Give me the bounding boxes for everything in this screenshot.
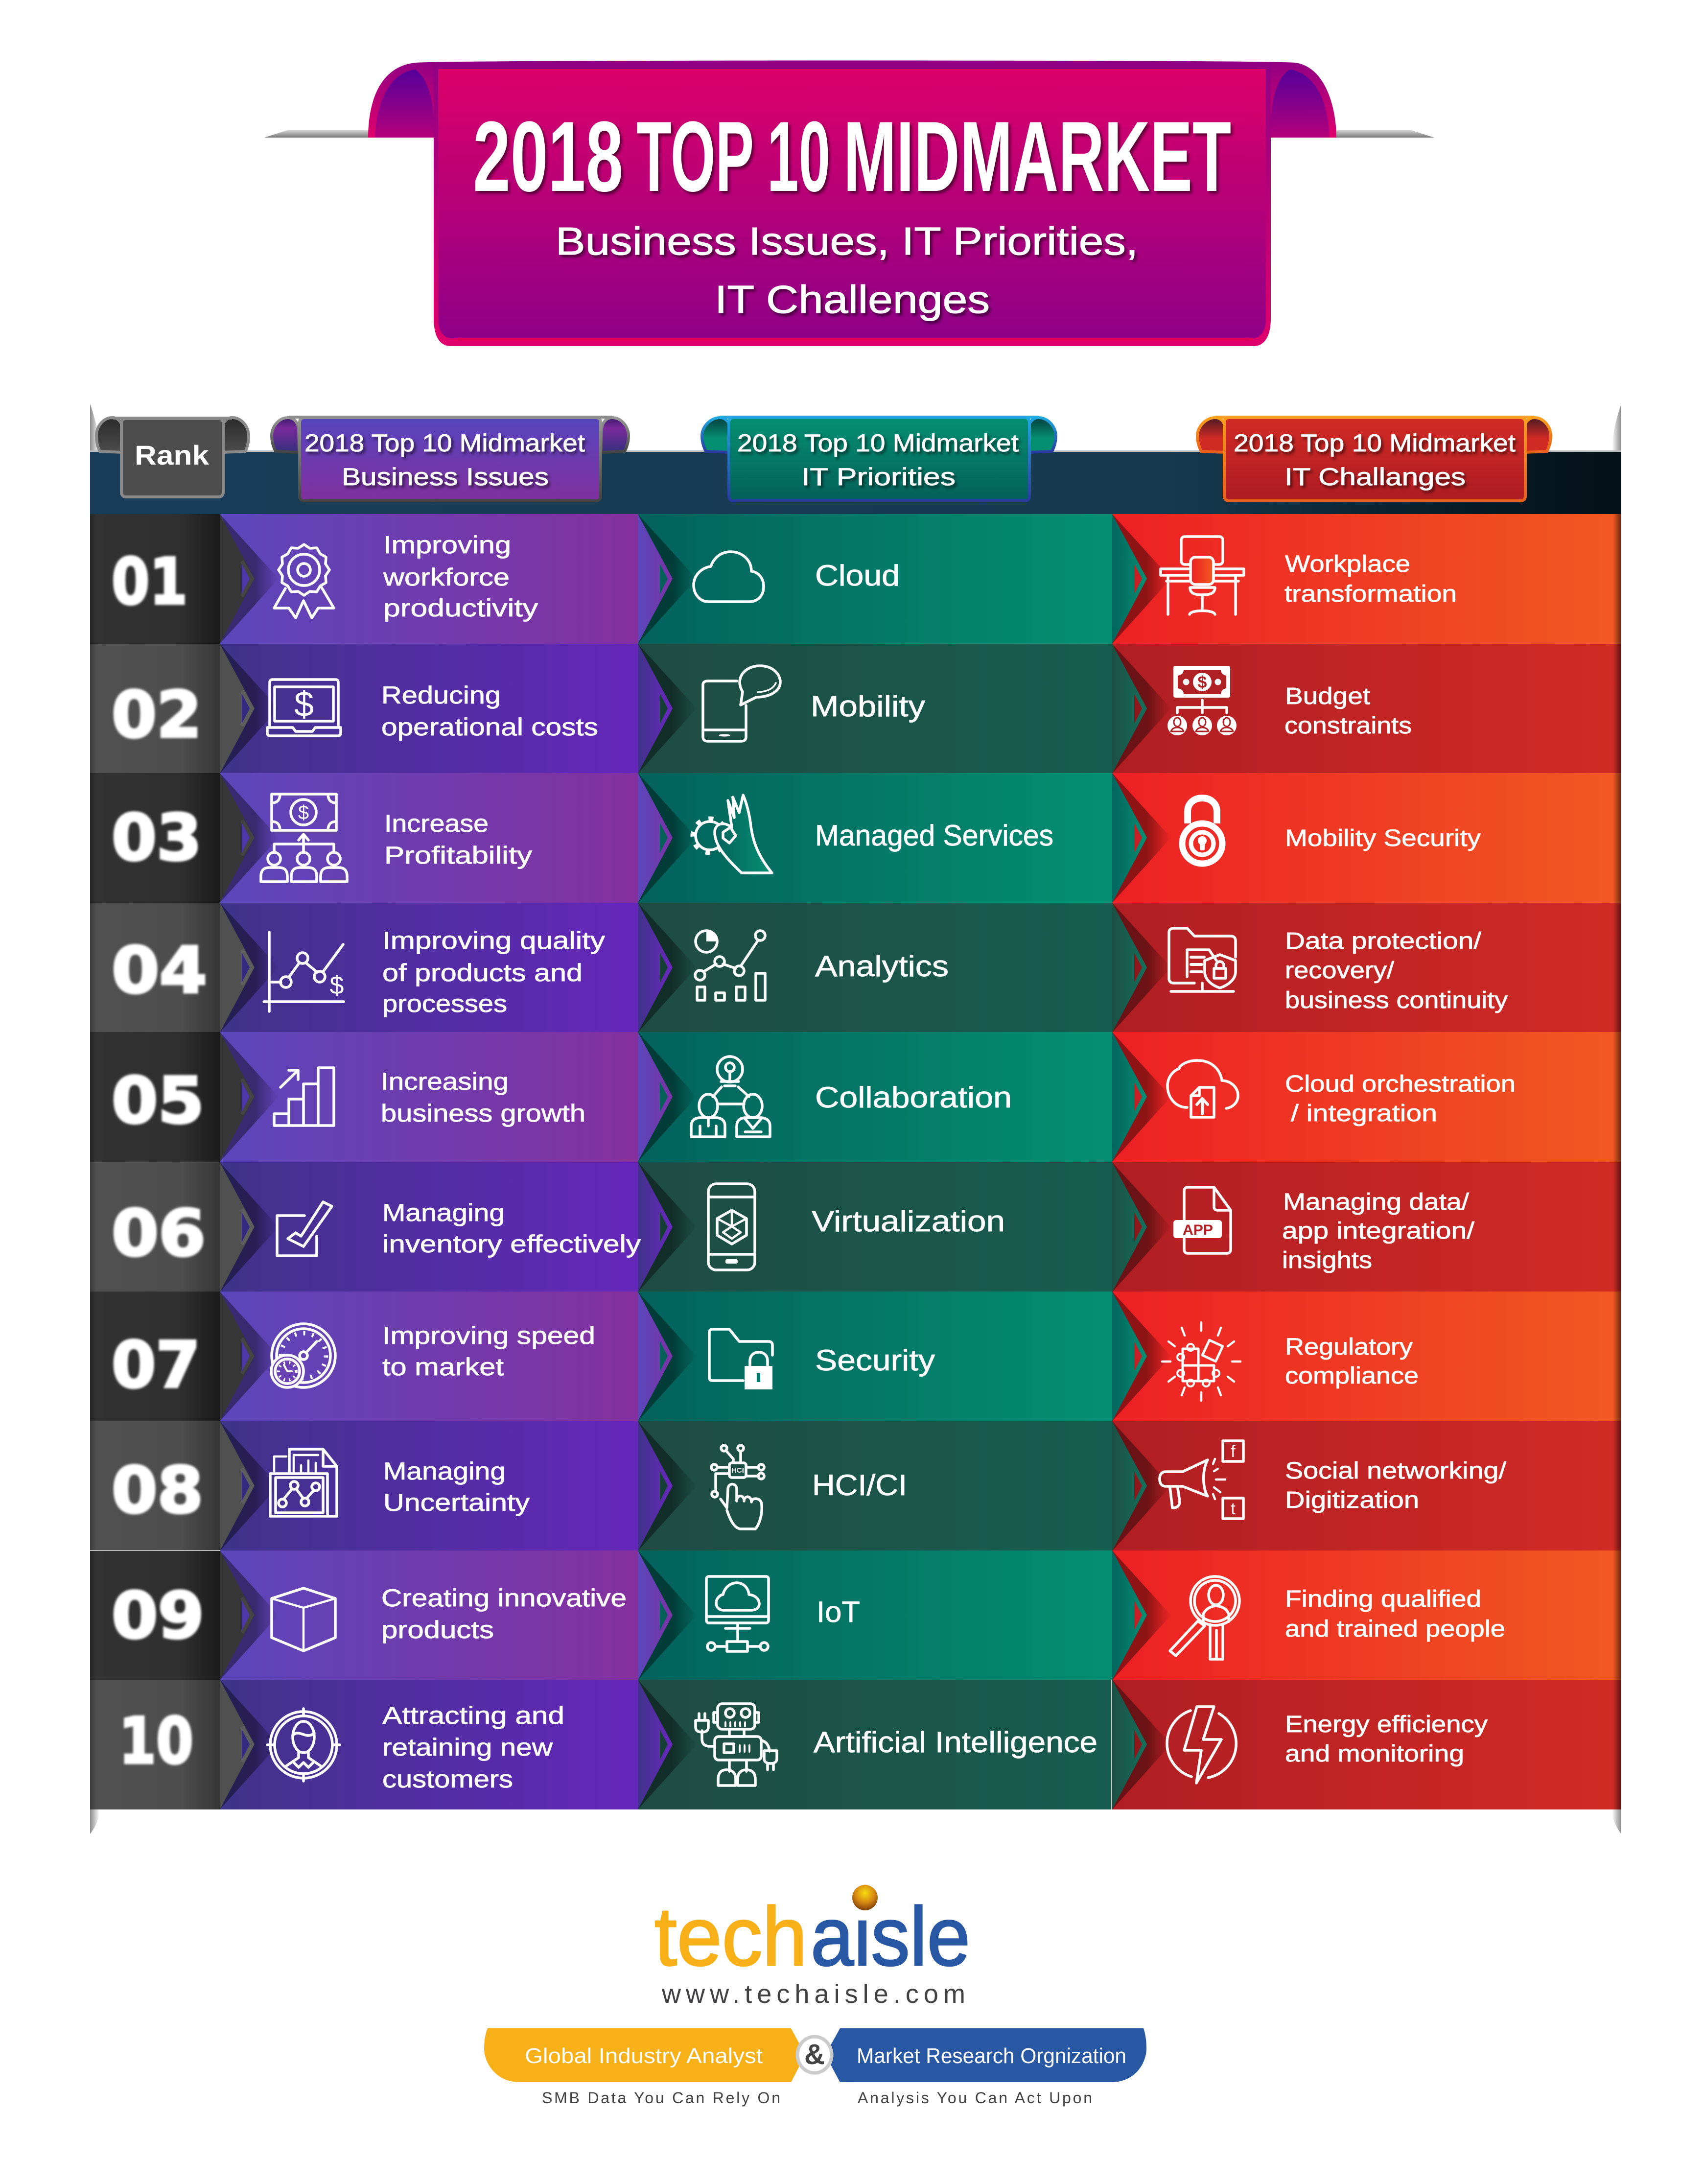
icon: data protection [1169,928,1236,991]
text: Improving quality of products and processes: Improving quality [382,927,605,954]
subtitle: IT Challenges [715,278,990,321]
text: Increasing business growth: business growth [381,1100,585,1127]
header: IT Priorities [702,417,1056,501]
rank 09 [90,1550,220,1680]
rank 04: 04 [112,933,207,1008]
text: Improving speed to market [382,1322,595,1381]
text: Managing inventory effectively [382,1199,641,1258]
icon: app file [1173,1187,1231,1253]
text: Budget constraints: constraints [1284,713,1412,739]
text: Increase Profitability [384,810,532,869]
icon: gear and hand [693,795,772,873]
text: Improving speed to market: Improving speed [382,1322,595,1349]
tagline left: SMB Data You Can Rely On [542,2089,780,2107]
text: Increasing business growth [381,1068,585,1127]
text: Improving workforce productivity: productivity [383,594,538,622]
text: Cloud orchestration / integration [1285,1071,1516,1127]
header: IT Priorities: 2018 Top 10 Midmarket [737,429,1019,457]
row 03 [90,773,1621,903]
subtitle: Business Issues, IT Priorities, [556,219,1138,263]
text: Mobility: Mobility [811,690,925,723]
website url: www.techaisle.com [661,1979,965,2009]
text: Mobility Security: Mobility Security [1285,825,1481,851]
text: Cloud orchestration / integration: Cloud orchestration [1285,1071,1516,1097]
rank 06 [90,1162,220,1292]
text: Workplace transformation [1284,551,1457,607]
row 02 [90,644,1621,774]
icon: HCI touch hand [711,1445,764,1529]
text: Data protection/ recovery/ business continuity [1285,928,1508,1013]
text: Managing data/ app integration/ insights: app integration/ [1282,1218,1475,1244]
icon: mobile phone with bubble [703,666,780,741]
rank 09: 09 [112,1578,204,1653]
icon: analytics [695,931,765,1000]
text: Finding qualified and trained people [1285,1586,1505,1642]
header: IT Challanges: IT Challanges [1284,463,1466,491]
icon: money and people: $ [298,802,309,823]
icon: money and people [261,794,347,882]
text: Creating innovative products: Creating innovative [381,1584,627,1612]
text: Regulatory compliance: compliance [1285,1363,1419,1389]
rank 02: 02 [112,678,202,752]
text: Virtualization: Virtualization [812,1205,1005,1238]
rank 05: 05 [112,1063,204,1138]
text: Increase Profitability: Profitability [384,842,532,869]
header: Business Issues [272,417,629,501]
icon: magnifier with person [1170,1576,1239,1659]
text: Energy efficiency and monitoring [1285,1712,1488,1767]
text: Managing Uncertainty: Managing [383,1457,506,1485]
text: Managing Uncertainty [383,1457,530,1516]
icon: padlock [1182,798,1222,864]
rank 10: 10 [119,1704,193,1778]
text: HCI/CI: HCI/CI [812,1469,907,1502]
rank 03 [90,773,220,903]
icon: energy bolt [1167,1707,1236,1783]
text: Cloud orchestration / integration: / integration [1291,1101,1437,1127]
text: Managed Services: Managed Services [815,819,1053,852]
icon: line chart with dollar: $ [330,971,344,1000]
row 07 [90,1292,1621,1421]
icon: check box [277,1202,332,1256]
rank 08: 08 [112,1453,203,1527]
icon: report with chart [270,1449,337,1516]
rank 07 [90,1292,220,1421]
text: Improving workforce productivity: workforce [383,564,510,591]
rank 02 [90,644,220,773]
icon: growth bars [274,1068,334,1126]
text: Reducing operational costs: operational costs [381,713,598,741]
text: Attracting and retaining new customers [382,1702,564,1793]
text: Energy efficiency and monitoring: Energy efficiency [1285,1712,1488,1738]
title text: MIDMARKET [843,101,1231,212]
text: Budget constraints: Budget [1285,683,1370,709]
text: Creating innovative products [381,1584,627,1644]
text: Social networking/ Digitization: Social networking/ [1285,1458,1507,1484]
text: Finding qualified and trained people: and trained people [1285,1616,1505,1642]
row 04 [90,903,1621,1033]
icon: megaphone and social: t [1231,1500,1236,1518]
text: Budget constraints [1284,683,1412,739]
text: Security: Security [815,1344,935,1377]
icon: app file: APP [1183,1222,1213,1238]
row 09 [90,1550,1621,1680]
text: Improving quality of products and processes: of products and [382,959,583,986]
text: Improving quality of products and processes [382,927,605,1017]
header: Business Issues: Business Issues [342,463,549,491]
text: Energy efficiency and monitoring: and monitoring [1285,1741,1464,1767]
row 05 [90,1032,1621,1162]
rank 04 [90,903,220,1032]
header: IT Challanges [1197,417,1551,501]
text: Regulatory compliance [1285,1334,1419,1389]
icon: budget bill and people [1167,666,1237,735]
title text: 2018 [473,101,623,212]
rank 10 [90,1680,220,1809]
text: Workplace transformation: Workplace [1285,551,1410,577]
text: Social networking/ Digitization [1285,1458,1507,1513]
title text: 10 [767,101,830,212]
icon: megaphone and social: f [1231,1442,1236,1461]
text: Managing inventory effectively: Managing [382,1199,505,1226]
icon: secure folder [709,1329,772,1389]
table header bar [90,404,1621,1834]
rank 07: 07 [112,1328,200,1402]
rank 05 [90,1032,220,1162]
icon: IoT monitor [706,1576,769,1651]
rank 03: 03 [112,800,202,875]
text: Artificial Intelligence: Artificial Intelligence [814,1726,1097,1759]
icon: line chart with dollar [264,932,344,1011]
text: Managing data/ app integration/ insights: insights [1282,1247,1372,1273]
row 08 [90,1421,1621,1551]
rank 01 [90,514,220,644]
icon: cloud [694,552,764,602]
ampersand badge: & [804,2039,825,2070]
text: Managing Uncertainty: Uncertainty [383,1489,530,1516]
text: Collaboration: Collaboration [815,1081,1012,1114]
icon: cube [272,1588,335,1651]
text: Reducing operational costs: Reducing [381,681,501,709]
text: Managing data/ app integration/ insights: Managing data/ [1283,1189,1470,1215]
pill: Market Research Orgnization [825,2028,1146,2082]
text: Increase Profitability: Increase [384,810,489,837]
icon: virtualization phone [708,1184,755,1270]
icon: collaboration people [691,1057,770,1137]
text: Reducing operational costs [381,681,598,741]
text: Regulatory compliance: Regulatory [1285,1334,1413,1360]
icon: robot [696,1704,777,1785]
icon: laptop with dollar: $ [294,685,314,724]
header: IT Challanges: 2018 Top 10 Midmarket [1234,429,1516,457]
text: Improving workforce productivity: Improving [383,531,511,559]
text: Data protection/ recovery/ business continuity: Data protection/ [1285,928,1482,954]
logo: techaisle: tech [654,1890,807,1983]
rank 01: 01 [112,544,187,619]
pill: Global Industry Analyst [484,2028,805,2082]
icon: cloud upload [1167,1060,1238,1117]
text: Analytics: Analytics [815,950,949,983]
text: Increasing business growth: Increasing [381,1068,509,1095]
text: Data protection/ recovery/ business continuity: business continuity [1285,987,1508,1013]
pill: Global Industry Analyst: Global Industry Analyst [525,2044,763,2068]
text: Attracting and retaining new customers: customers [382,1765,513,1793]
text: Managing data/ app integration/ insights [1282,1189,1475,1273]
logo: techaisle [654,1885,970,1983]
header: IT Priorities: IT Priorities [801,463,956,491]
text: Managing inventory effectively: inventory effectively [382,1230,641,1258]
icon: laptop with dollar [267,680,341,736]
title banner [264,61,1434,346]
header: Rank: Rank [135,440,210,470]
icon: speedometer [271,1324,335,1387]
icon: budget bill and people: $ [1198,673,1207,692]
title text [473,101,1231,212]
text: Creating innovative products: products [381,1616,494,1644]
text: IoT: IoT [817,1596,860,1628]
text: Data protection/ recovery/ business continuity: recovery/ [1285,958,1395,984]
ampersand badge [797,2037,832,2073]
icon: workplace desk [1161,537,1244,614]
logo ball [852,1885,878,1910]
text: Workplace transformation: transformation [1284,581,1457,607]
row 10 [90,1680,1621,1809]
text: Improving speed to market: to market [382,1353,504,1381]
tagline right: Analysis You Can Act Upon [858,2089,1092,2107]
text: Cloud: Cloud [815,559,900,592]
text: Attracting and retaining new customers: Attracting and [382,1702,564,1729]
text: Improving workforce productivity [383,531,538,622]
rank 06: 06 [112,1196,206,1270]
subtitle [556,219,1138,321]
text: Improving quality of products and processes: processes [382,990,507,1017]
icon: megaphone and social [1160,1441,1243,1519]
icon: puzzle with rays [1162,1322,1240,1401]
row 06 [90,1162,1621,1292]
icon: HCI touch hand: HCI [731,1466,744,1475]
pill: Market Research Orgnization: Market Research Orgnization [857,2044,1126,2068]
text: Social networking/ Digitization: Digitization [1285,1487,1419,1513]
text: Finding qualified and trained people: Finding qualified [1285,1586,1481,1612]
rank 08 [90,1421,220,1550]
logo: techaisle: aisle [811,1890,970,1983]
header: Business Issues: 2018 Top 10 Midmarket [304,429,585,457]
text: Attracting and retaining new customers: retaining new [382,1734,553,1761]
row 01 [90,514,1621,644]
header: Rank [96,418,249,497]
title text: TOP [636,101,754,212]
icon: award rosette [274,544,334,618]
icon: target customer [267,1709,340,1781]
